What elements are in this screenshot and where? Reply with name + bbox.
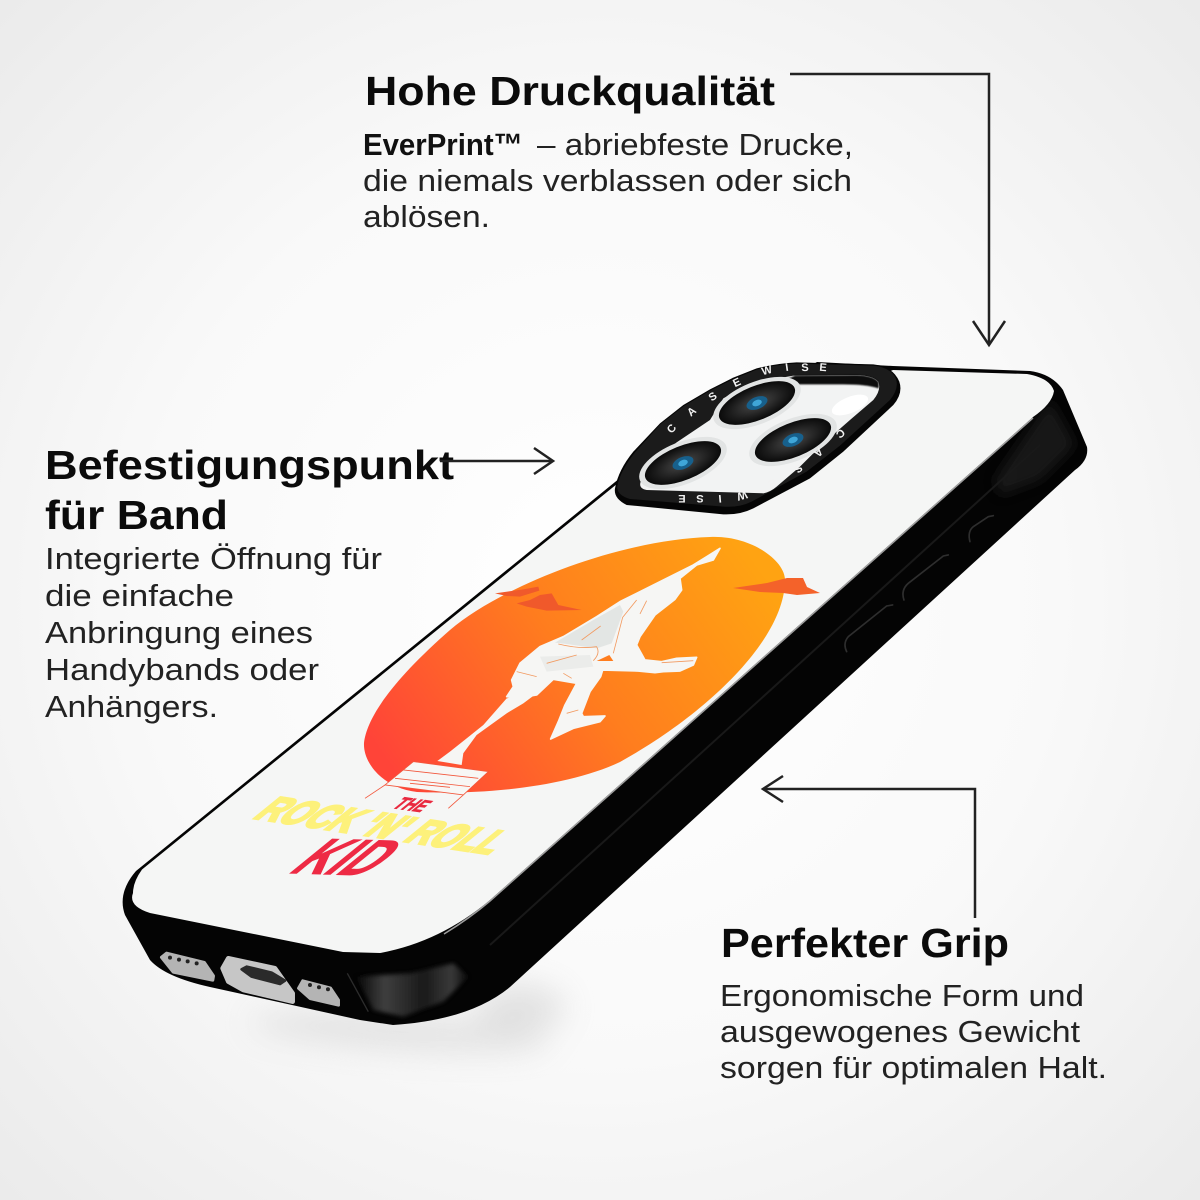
- heading: Befestigungspunkt für Band: für Band: [45, 492, 228, 538]
- text block: grip: Ergonomische Form und: [720, 978, 1084, 1013]
- ring lettering: E: [766, 476, 778, 490]
- text block: strap attachment: die einfache: [45, 578, 234, 613]
- ring lettering: W: [760, 364, 774, 378]
- text block: grip: [720, 978, 1107, 1085]
- plate top shadow: [760, 375, 879, 392]
- text block: EverPrint description: – abriebfeste Drucke,: [537, 127, 853, 162]
- ring lettering: S: [801, 362, 809, 374]
- text block: grip: sorgen für optimalen Halt.: [720, 1050, 1107, 1085]
- ring lettering: E: [678, 492, 686, 504]
- printed back: [132, 370, 1054, 953]
- artwork: right cloud: [733, 578, 820, 595]
- phone drop shadow: [249, 984, 565, 1059]
- ring lettering: W: [735, 488, 749, 502]
- ring lettering: [665, 362, 847, 504]
- side rail shading: [347, 400, 1075, 1017]
- text block: EverPrint description: EverPrint™: [363, 127, 523, 162]
- ring lettering: E: [731, 376, 743, 390]
- ring lettering: C: [665, 422, 679, 436]
- artwork: amplifier: [365, 762, 488, 808]
- heading: Befestigungspunkt für Band: [45, 442, 454, 538]
- corner gloss: [347, 963, 468, 1017]
- ring lettering: S: [707, 390, 719, 404]
- bottom speaker and charging port: [162, 953, 339, 1005]
- case body: [123, 362, 1087, 1025]
- heading: Befestigungspunkt für Band: Befestigungspunkt: [45, 442, 454, 488]
- text block: strap attachment: [45, 541, 382, 724]
- lens top: [706, 366, 808, 440]
- side buttons: [845, 516, 993, 652]
- text block: EverPrint description: ablösen.: [363, 199, 490, 234]
- glass glare: [829, 390, 871, 420]
- heading: Perfekter Grip: Perfekter Grip: [721, 920, 1009, 966]
- artwork: figure back leg and foot: [437, 693, 537, 765]
- ring lettering: S: [792, 461, 804, 475]
- text block: EverPrint description: [363, 127, 853, 234]
- arrow: strap point: [440, 448, 553, 474]
- text block: strap attachment: Anhängers.: [45, 689, 218, 724]
- artwork: KID: KID: [273, 829, 421, 886]
- ring lettering: A: [811, 445, 825, 459]
- edge sheen: [444, 418, 1033, 934]
- text block: strap attachment: Handybands oder: [45, 652, 319, 687]
- camera inner plate: [640, 375, 879, 493]
- lens right: [742, 403, 844, 477]
- artwork: clouds: [495, 587, 582, 611]
- artwork: ROCK 'N' ROLL: ROCK 'N' ROLL: [243, 791, 522, 861]
- heading: Hohe Druckqualität: Hohe Druckqualität: [365, 68, 775, 114]
- ring lettering: C: [833, 426, 847, 440]
- text block: grip: ausgewogenes Gewicht: [720, 1014, 1080, 1049]
- camera module: [615, 362, 900, 514]
- ring lettering: S: [696, 492, 704, 504]
- text block: EverPrint description: die niemals verblassen oder sich: [363, 163, 852, 198]
- text block: strap attachment: Integrierte Öffnung für: [45, 541, 382, 576]
- arrow: print quality: [790, 74, 1005, 345]
- ring lettering: I: [785, 362, 789, 374]
- artwork: THE: THE: [386, 794, 437, 816]
- phone case: [123, 362, 1087, 1025]
- ring lettering: I: [718, 492, 722, 504]
- ring lettering: A: [685, 405, 699, 419]
- ring lettering: E: [819, 362, 827, 374]
- side groove: [490, 445, 1040, 945]
- arrow: grip: [763, 776, 975, 918]
- camera ring: [615, 362, 900, 514]
- artwork: sun: [364, 537, 785, 793]
- artwork: rock guitarist figure: [507, 548, 720, 739]
- text block: strap attachment: Anbringung eines: [45, 615, 313, 650]
- lens left: [632, 426, 734, 500]
